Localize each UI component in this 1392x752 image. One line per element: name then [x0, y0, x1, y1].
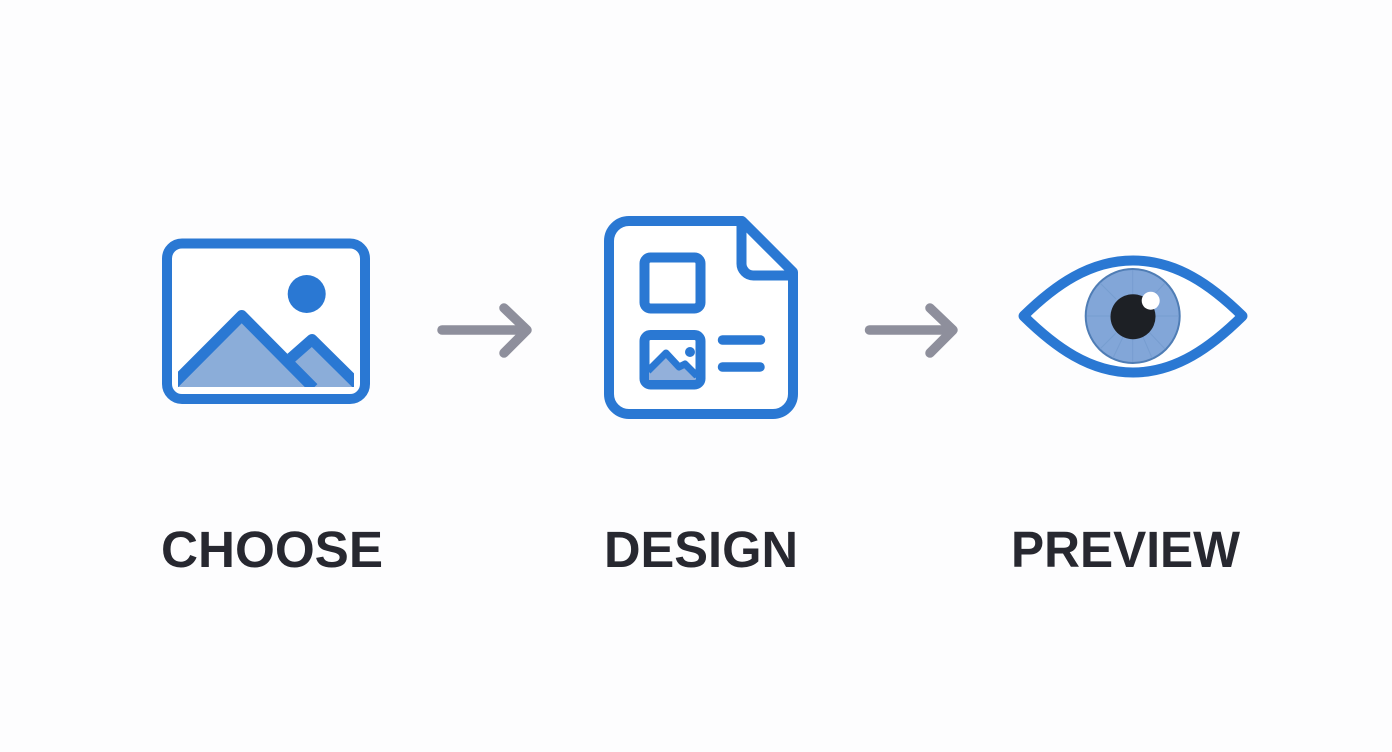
icon part: highlight — [1142, 292, 1160, 310]
label: choose: CHOOSE — [161, 521, 383, 578]
icon part: empty square — [644, 258, 700, 308]
icon part: text lines — [722, 340, 760, 367]
icon part: sun — [288, 275, 326, 313]
icon part: mountains — [170, 316, 360, 388]
arrow: choose to design — [442, 308, 527, 353]
icon part: pupil — [1110, 294, 1156, 339]
arrow: design to preview — [870, 308, 953, 353]
icon: eye — [1024, 260, 1242, 372]
icon: image picture — [167, 244, 365, 399]
icon part: iris — [1086, 269, 1180, 363]
label: design: DESIGN — [604, 521, 798, 578]
icon part: small image — [644, 335, 700, 384]
icon: document layout — [609, 221, 793, 414]
icon part: page fold — [741, 221, 793, 276]
infographic: choose, design, preview process — [162, 216, 1248, 568]
label: preview: PREVIEW — [1011, 521, 1241, 578]
